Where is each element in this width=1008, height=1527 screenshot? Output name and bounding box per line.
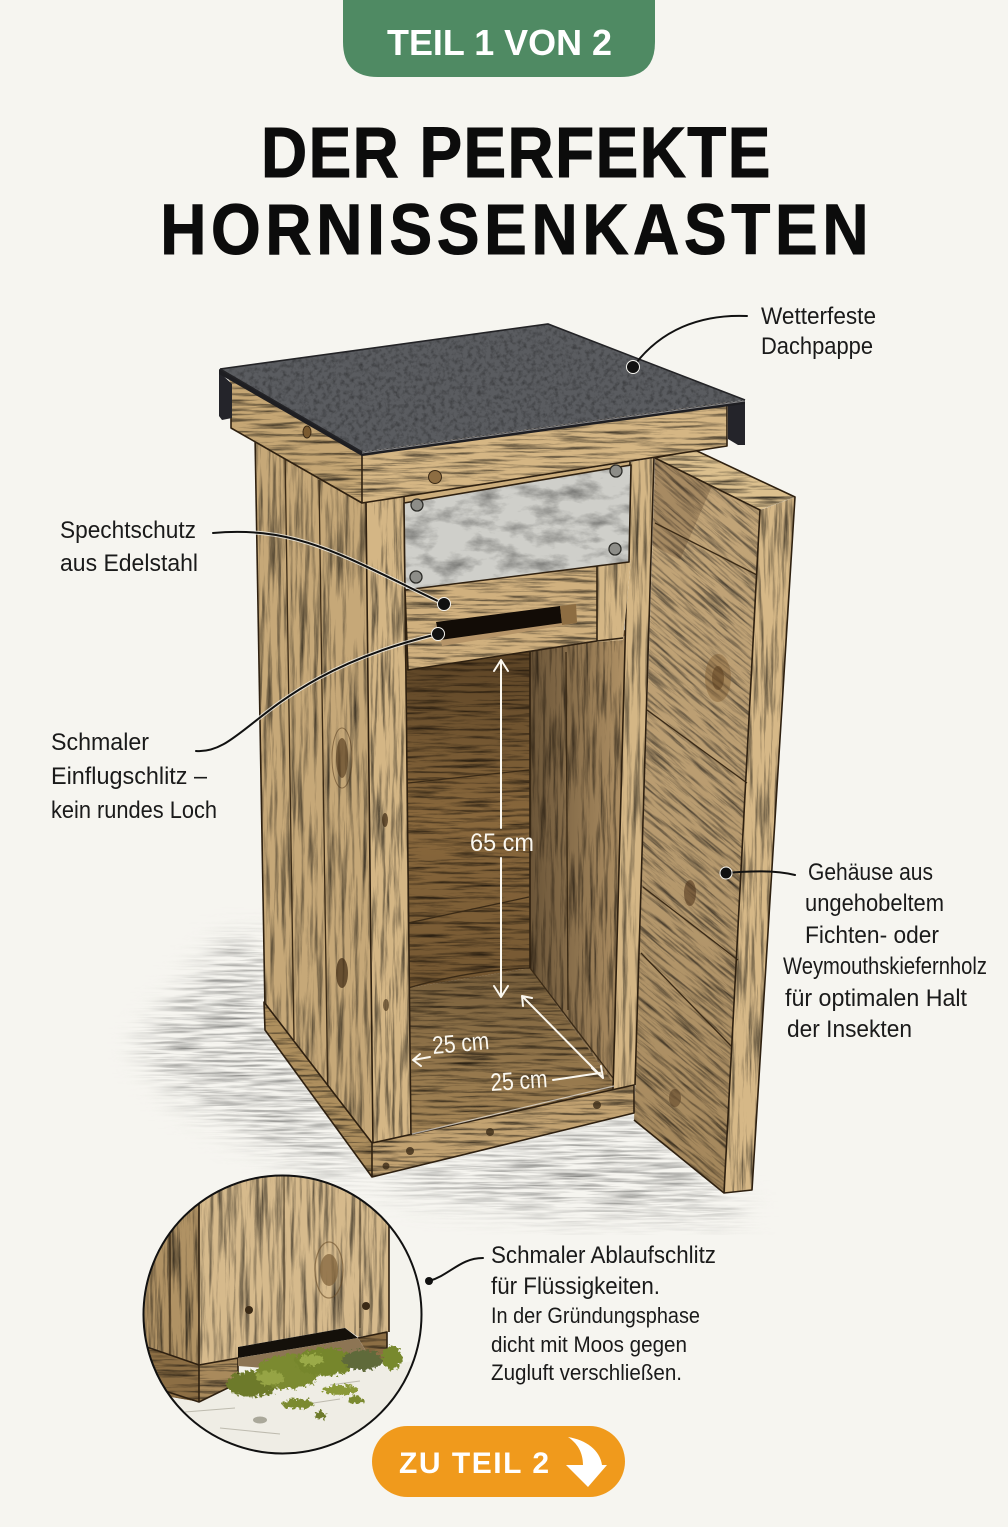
screws bbox=[410, 465, 622, 583]
callout: entrance slit bbox=[51, 628, 444, 824]
callout: housing wood: der Insekten bbox=[787, 1016, 912, 1043]
title: HORNISSENKASTEN bbox=[160, 191, 869, 270]
callout: roofing felt: Wetterfeste bbox=[761, 303, 876, 330]
dimension: depth 25 cm: 25 cm bbox=[489, 1065, 548, 1097]
box front posts bbox=[366, 458, 654, 1148]
dimension: depth 25 cm bbox=[489, 996, 603, 1097]
ground shadow under box bbox=[140, 940, 750, 1215]
moss bbox=[226, 1346, 402, 1419]
stainless steel plate bbox=[404, 465, 631, 590]
callout: drainage slit: für Flüssigkeiten. bbox=[491, 1273, 660, 1300]
callout: drainage slit bbox=[425, 1242, 716, 1385]
illustration: wooden hornet box bbox=[219, 324, 1008, 1255]
callout: entrance slit: kein rundes Loch bbox=[51, 797, 217, 824]
callout: roofing felt bbox=[626, 303, 876, 374]
roofing felt bbox=[219, 324, 745, 456]
ground bbox=[184, 1380, 360, 1434]
badge: Teil 1 von 2 bbox=[343, 0, 655, 77]
base frame bbox=[264, 1002, 634, 1177]
left side planks bbox=[144, 1205, 198, 1364]
dimension: height 65 cm: 65 cm bbox=[470, 829, 534, 857]
lintel with entrance slit bbox=[405, 560, 631, 670]
callout: drainage slit: dicht mit Moos gegen bbox=[491, 1332, 687, 1357]
button: Zu Teil 2: ZU TEIL 2 bbox=[399, 1447, 549, 1480]
box interior bbox=[404, 630, 630, 1140]
callout: housing wood: Fichten- oder bbox=[805, 922, 939, 949]
callout: housing wood: ungehobeltem bbox=[805, 890, 944, 917]
detail lens: drainage slit bbox=[130, 1170, 422, 1460]
dimension: width 25 cm bbox=[413, 1027, 490, 1066]
callout: woodpecker guard bbox=[60, 517, 450, 610]
base boards bbox=[130, 1332, 387, 1402]
badge: Teil 1 von 2: TEIL 1 VON 2 bbox=[387, 22, 612, 63]
roof fascia bbox=[226, 372, 727, 503]
callout: roofing felt: Dachpappe bbox=[761, 333, 873, 360]
title: DER PERFEKTE bbox=[261, 114, 770, 193]
callout: woodpecker guard: Spechtschutz bbox=[60, 517, 196, 544]
callout: drainage slit: In der Gründungsphase bbox=[491, 1303, 700, 1328]
callout: woodpecker guard: aus Edelstahl bbox=[60, 550, 198, 577]
callout: entrance slit: Schmaler bbox=[51, 729, 149, 756]
callout: drainage slit: Schmaler Ablaufschlitz bbox=[491, 1242, 716, 1269]
icon: curved arrow bbox=[566, 1437, 607, 1487]
callout: housing wood: Gehäuse aus bbox=[808, 859, 933, 886]
drainage slit bbox=[238, 1328, 366, 1368]
open door bbox=[272, 396, 1008, 1255]
callout: housing wood bbox=[720, 859, 987, 1043]
callout: housing wood: für optimalen Halt bbox=[785, 985, 967, 1012]
dimension: height 65 cm bbox=[470, 660, 534, 997]
box left side bbox=[255, 435, 373, 1148]
entrance slit bbox=[436, 604, 577, 646]
front planks bbox=[199, 1170, 389, 1365]
dimension: width 25 cm: 25 cm bbox=[431, 1027, 490, 1060]
title bbox=[160, 114, 869, 270]
callout: entrance slit: Einflugschlitz – bbox=[51, 763, 208, 790]
button: Zu Teil 2 bbox=[372, 1426, 625, 1497]
callout: drainage slit: Zugluft verschließen. bbox=[491, 1360, 682, 1385]
